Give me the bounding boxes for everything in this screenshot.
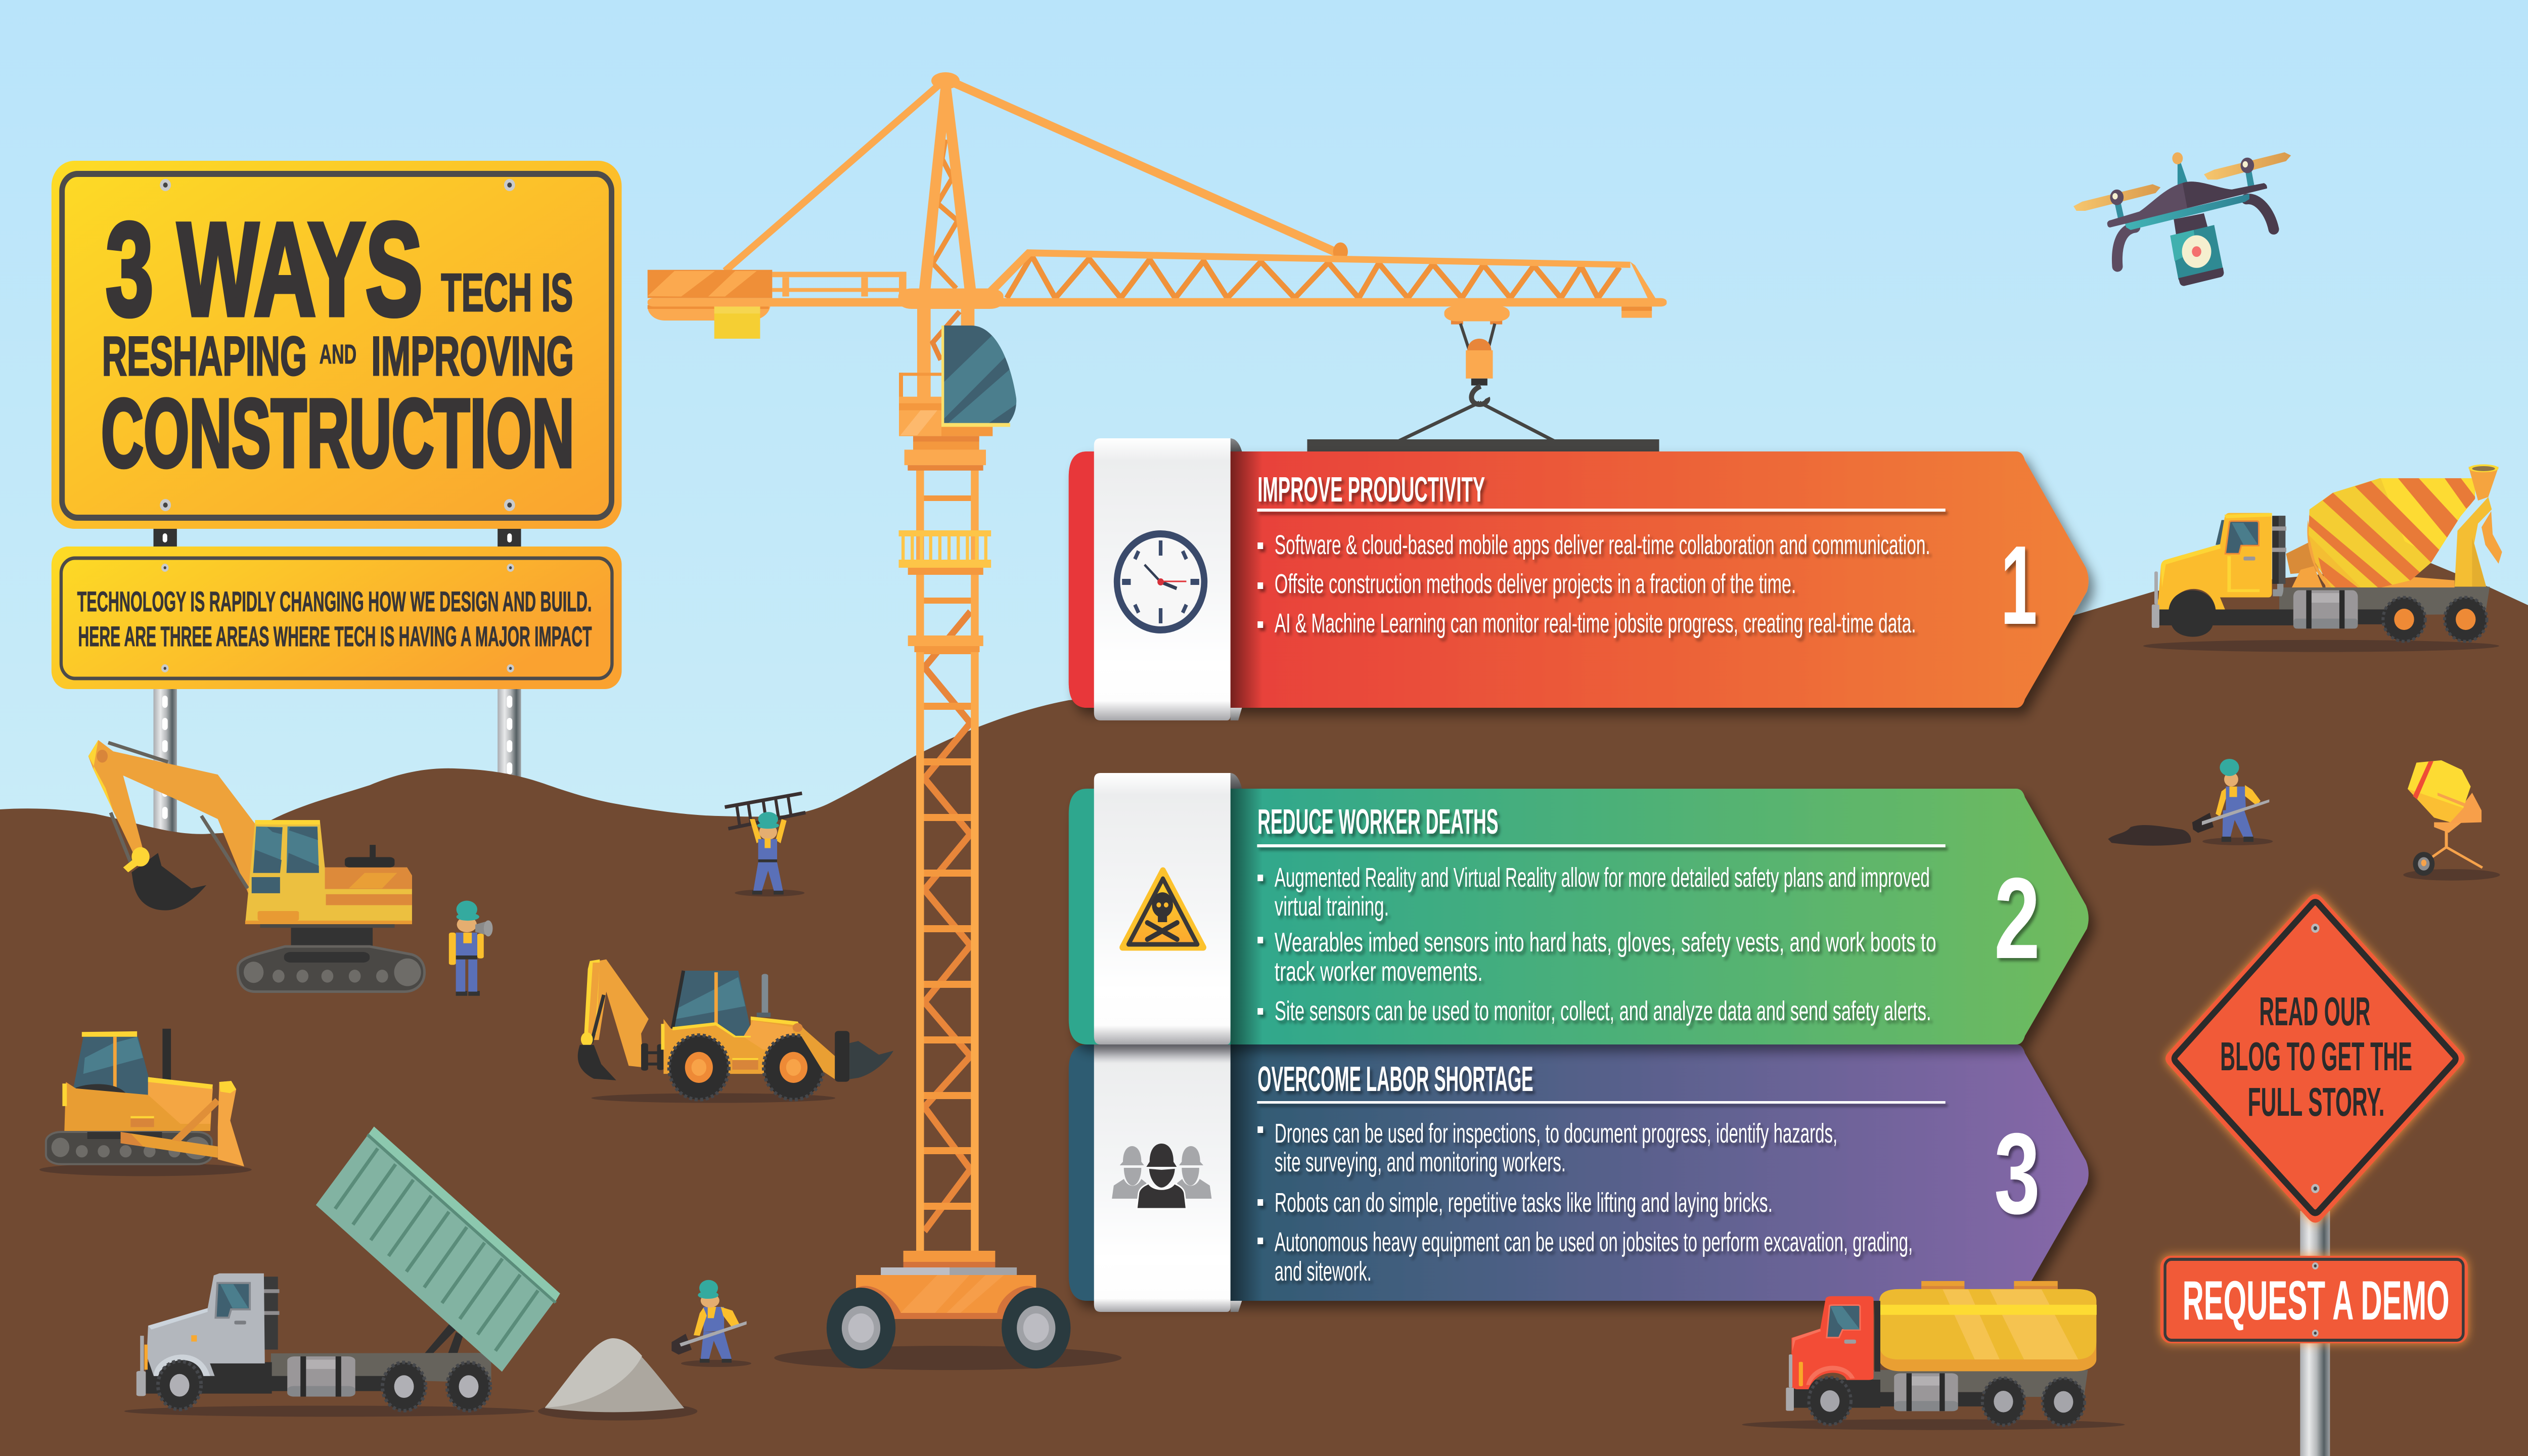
road sign post xyxy=(2300,1211,2330,1456)
banner 1 arrow xyxy=(1069,451,2089,708)
title xyxy=(101,195,574,487)
mixer chute xyxy=(2455,497,2502,587)
bulldozer shadow xyxy=(39,1163,252,1176)
worker with shovel xyxy=(671,1280,751,1367)
portable cement mixer xyxy=(2403,760,2500,881)
number 1: 1 xyxy=(2001,522,2037,648)
counter jib rail xyxy=(772,272,907,297)
intro board xyxy=(52,547,622,689)
banner 2 title: REDUCE WORKER DEATHS xyxy=(1257,802,1498,842)
bulldozer cabin xyxy=(73,1031,149,1097)
bulldozer body xyxy=(62,1077,213,1131)
ladder worker xyxy=(725,793,805,896)
tanker tank xyxy=(1879,1289,2097,1371)
banner 2 text: virtual training. xyxy=(1275,891,1389,922)
slew collar xyxy=(898,288,1004,309)
banner 3 text xyxy=(1275,1118,1913,1287)
tanker wheels xyxy=(1809,1378,2085,1426)
crane tower yellow platform xyxy=(899,530,991,575)
digging worker xyxy=(2192,759,2273,845)
demo screws xyxy=(2312,1262,2319,1337)
tanker truck xyxy=(1742,1281,2125,1430)
dump truck bed xyxy=(316,1126,560,1372)
mixer drum xyxy=(2307,476,2476,589)
backhoe body xyxy=(661,1017,826,1074)
drone upper shell xyxy=(2107,181,2267,228)
title: AND xyxy=(320,339,356,370)
drone teal body xyxy=(2125,194,2249,230)
diamond screws xyxy=(2311,924,2319,1193)
mixer shadow xyxy=(2143,640,2499,652)
drone rotor hubs xyxy=(2110,158,2254,205)
hook cables xyxy=(1461,324,1495,352)
dump truck hydraulic rams xyxy=(425,1325,463,1353)
excavator body xyxy=(245,820,412,928)
mast cables xyxy=(725,81,1336,271)
jib chords xyxy=(648,249,1666,306)
banner 3 title: OVERCOME LABOR SHORTAGE xyxy=(1257,1059,1533,1099)
intro text: HERE ARE THREE AREAS WHERE TECH IS HAVING A MAJOR IMPACT xyxy=(78,621,592,653)
drone antenna xyxy=(2172,152,2188,187)
ground hills xyxy=(0,563,2528,1456)
diamond text: FULL STORY. xyxy=(2248,1080,2384,1125)
intro border xyxy=(61,558,612,678)
jib end tab xyxy=(1621,306,1652,318)
dump truck xyxy=(124,1126,751,1421)
backhoe front loader xyxy=(793,1023,893,1082)
jib load pulley xyxy=(1333,242,1348,261)
hook xyxy=(1471,386,1487,404)
tanker hatches xyxy=(1921,1281,2058,1290)
drone propellers xyxy=(2073,152,2291,211)
lifting slings xyxy=(1399,402,1554,441)
sign brackets xyxy=(154,529,521,547)
tanker cab xyxy=(1791,1296,1880,1389)
drone rotor posts xyxy=(2114,167,2255,223)
banner 2 bullets xyxy=(1257,875,1263,1015)
banner 1 text: Software & cloud-based mobile apps deliver real-time collaboration and communication. xyxy=(1275,529,1930,560)
banner 2 title xyxy=(1257,802,2040,1026)
banner 3 text: Drones can be used for inspections, to document progress, identify hazards, xyxy=(1275,1118,1837,1149)
screws xyxy=(160,179,515,511)
banner 3 white ribbon xyxy=(1094,1044,1231,1312)
banner 2 text xyxy=(1275,862,1936,1026)
crane load xyxy=(1307,439,1659,454)
banner 1 top ribbon curl xyxy=(1231,438,1242,451)
dump truck fuel tank xyxy=(287,1356,355,1397)
banner 2 arrow xyxy=(1069,789,2089,1044)
banner 2 text: Site sensors can be used to monitor, collect, and analyze data and send safety alerts. xyxy=(1275,995,1931,1026)
tanker fuel tank xyxy=(1894,1373,1958,1411)
title: TECH IS xyxy=(441,263,573,323)
drone camera xyxy=(2170,225,2224,286)
title: IMPROVING xyxy=(371,326,574,387)
banner 2 text: Wearables imbed sensors into hard hats, gloves, safety vests, and work boots to xyxy=(1275,927,1936,958)
banner 1 text xyxy=(1275,529,1930,639)
mixer bumper xyxy=(2152,571,2159,628)
crane wheels xyxy=(827,1288,1070,1369)
diamond border xyxy=(2175,902,2456,1213)
banner 1 bullets xyxy=(1257,542,1263,628)
tower crane xyxy=(648,72,1666,1370)
title: CONSTRUCTION xyxy=(101,379,574,487)
call to action diamond sign xyxy=(2165,894,2465,1222)
backhoe stabilizer xyxy=(641,1043,664,1071)
tanker bumper xyxy=(1786,1354,1794,1411)
concrete mixer truck xyxy=(2143,465,2502,652)
panel: 2 reduce worker deaths xyxy=(1069,773,2089,1044)
sign border xyxy=(62,174,612,518)
banner 1 text: Offsite construction methods deliver projects in a fraction of the time. xyxy=(1275,568,1796,599)
dump truck wheels xyxy=(158,1361,490,1410)
mixer fuel tank xyxy=(2293,590,2358,628)
panel: intro sign xyxy=(52,547,622,689)
dirt pile xyxy=(2108,825,2191,846)
drone upper shell shade xyxy=(2183,181,2267,208)
banner 1 bottom ribbon curl xyxy=(1231,708,1242,720)
dump truck exhaust xyxy=(264,1277,279,1350)
mixer cab xyxy=(2155,513,2272,609)
mixer drum support xyxy=(2286,520,2455,587)
backhoe shadow xyxy=(592,1093,835,1103)
number 2: 2 xyxy=(1994,854,2040,983)
megaphone worker xyxy=(449,901,493,996)
banner 3 bullets xyxy=(1257,1126,1263,1244)
banner 3 text: Autonomous heavy equipment can be used on jobsites to perform excavation, grading, xyxy=(1275,1226,1913,1257)
banner 3 arrow xyxy=(1069,1044,2089,1301)
excavator xyxy=(88,740,425,991)
bulldozer exhaust xyxy=(162,1029,171,1080)
bulldozer track xyxy=(46,1132,212,1164)
banner 1 title: IMPROVE PRODUCTIVITY xyxy=(1257,470,1485,510)
banner 3 title xyxy=(1257,1059,2040,1287)
slew ring xyxy=(905,436,986,471)
panel: right side signs and site details xyxy=(2108,759,2500,881)
backhoe loader xyxy=(578,960,893,1103)
banner 2 strip shadow xyxy=(1231,789,1262,1044)
drone camera mount xyxy=(2174,213,2208,235)
title: RESHAPING xyxy=(102,326,307,387)
diamond text: READ OUR xyxy=(2259,989,2370,1034)
hook block xyxy=(1466,339,1493,385)
trolley xyxy=(1444,306,1510,325)
banner 2 text: Augmented Reality and Virtual Reality allow for more detailed safety plans and improved xyxy=(1275,862,1930,893)
panel: main title sign xyxy=(52,161,622,547)
crane base xyxy=(850,1251,1043,1320)
panel: 3 overcome labor shortage xyxy=(1069,1044,2089,1312)
operator cabin glass xyxy=(941,326,1022,427)
number 3: 3 xyxy=(1994,1110,2040,1238)
icon: warning skull xyxy=(1122,871,1203,947)
banner 3 text: site surveying, and monitoring workers. xyxy=(1275,1147,1566,1177)
banner 2 text: track worker movements. xyxy=(1275,956,1483,987)
backhoe exhaust xyxy=(757,974,771,1017)
operator platform xyxy=(899,373,992,436)
banner 1 strip shadow xyxy=(1231,451,1262,708)
mixer wheels xyxy=(2169,590,2487,642)
dump truck chassis xyxy=(146,1353,491,1394)
backhoe wheels xyxy=(669,1035,824,1100)
banner 2 white ribbon xyxy=(1094,773,1231,1044)
excavator bucket xyxy=(123,847,206,911)
sand pile xyxy=(538,1338,697,1421)
demo board xyxy=(2160,1256,2468,1343)
bulldozer xyxy=(39,1029,252,1176)
excavator tracks xyxy=(238,928,425,991)
crane jib and mast xyxy=(648,72,1666,471)
banner 2 ribbon curl xyxy=(1231,773,1242,789)
icon: clock xyxy=(1117,534,1204,630)
loader bucket xyxy=(835,1031,893,1082)
icon: workers xyxy=(1112,1144,1211,1209)
tanker shadow xyxy=(1742,1419,2125,1430)
dump truck bumper xyxy=(137,1336,146,1396)
loader arm xyxy=(795,1026,836,1079)
intro screws xyxy=(161,564,514,672)
counterweight xyxy=(648,270,772,339)
mast bracing xyxy=(933,140,958,288)
banner 3 text: Robots can do simple, repetitive tasks like lifting and laying bricks. xyxy=(1275,1187,1773,1218)
jib bracing xyxy=(1007,255,1619,298)
title: 3 WAYS xyxy=(106,195,423,344)
icon: drone xyxy=(2073,152,2291,286)
mixer chassis xyxy=(2157,587,2490,625)
panel: post of left sign xyxy=(154,689,521,851)
crane tower lattice xyxy=(908,470,983,1251)
loader pivot xyxy=(793,1023,802,1032)
intro text: TECHNOLOGY IS RAPIDLY CHANGING HOW WE DESIGN AND BUILD. xyxy=(77,586,592,618)
banner 1 text: AI & Machine Learning can monitor real-time jobsite progress, creating real-time data. xyxy=(1275,608,1916,639)
panel: 1 improve productivity xyxy=(1069,438,2089,720)
banner 3 ribbon curl xyxy=(1231,1301,1242,1312)
banner 1 left color block xyxy=(1069,451,1103,708)
crane ground shadow xyxy=(774,1346,1121,1370)
tanker chassis xyxy=(1794,1370,2088,1408)
banner 3 strip shadow xyxy=(1231,1044,1262,1301)
mixer funnel xyxy=(2469,465,2499,500)
diamond board xyxy=(2165,894,2465,1222)
upper tower xyxy=(917,309,974,379)
excavator boom xyxy=(88,740,255,898)
mixer exhaust xyxy=(2272,516,2286,596)
backhoe rear section xyxy=(578,960,835,1103)
demo border xyxy=(2165,1259,2463,1340)
dump truck cab xyxy=(145,1273,265,1381)
request a demo sign xyxy=(2160,1256,2468,1343)
banner 1 white ribbon xyxy=(1094,438,1231,720)
backhoe arm xyxy=(584,960,649,1067)
mast legs xyxy=(919,72,976,288)
backhoe glass xyxy=(672,971,752,1037)
dump truck shadow xyxy=(124,1405,535,1417)
bulldozer blade xyxy=(121,1081,244,1166)
banner 3 text: and sitework. xyxy=(1275,1256,1372,1287)
diamond text xyxy=(2220,989,2412,1125)
sky background xyxy=(0,0,2528,859)
sign board xyxy=(52,161,622,529)
intro text xyxy=(77,586,592,653)
drone landing legs xyxy=(2117,199,2274,266)
banner 1 title xyxy=(1257,470,2037,648)
backhoe bucket xyxy=(578,1032,616,1080)
